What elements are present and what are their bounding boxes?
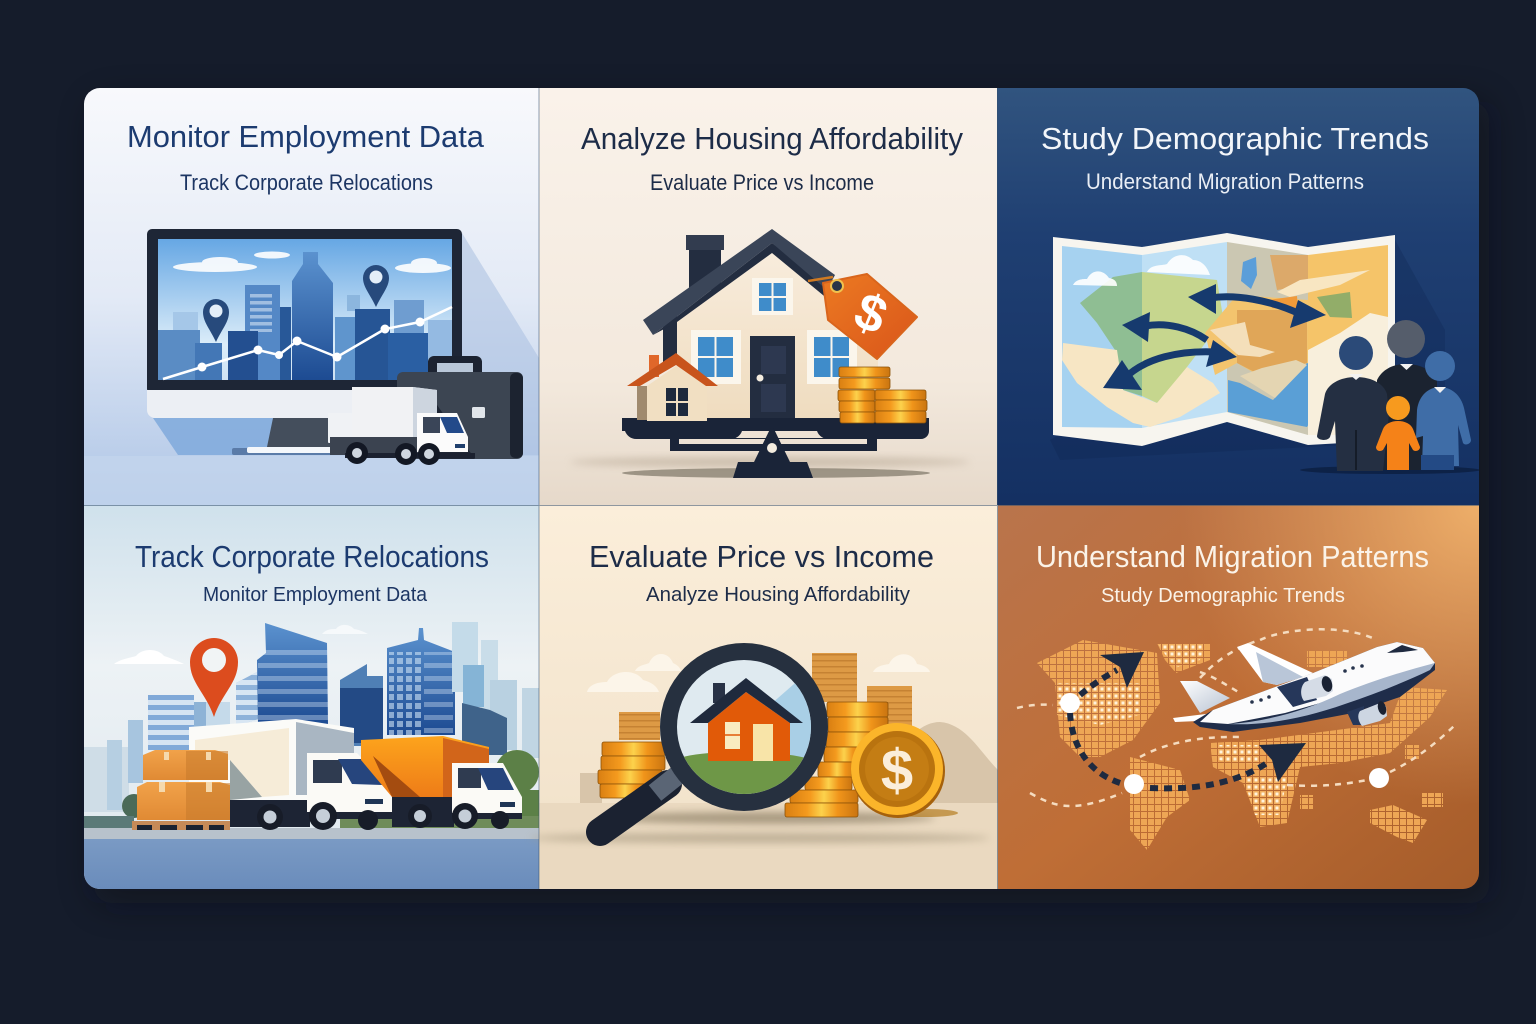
illustration: city skyline xyxy=(84,622,539,828)
panel: understand migration patterns xyxy=(998,505,1479,889)
subheading: track corporate relocations: Track Corporate Relocations xyxy=(180,170,433,195)
icon: coin stacks xyxy=(838,367,927,423)
heading: understand migration patterns: Understand Migration Patterns xyxy=(1036,539,1429,574)
icon: large house xyxy=(643,229,878,418)
heading: evaluate price vs income: Evaluate Price vs Income xyxy=(589,539,934,574)
subheading: analyze housing affordability: Analyze Housing Affordability xyxy=(646,583,911,606)
icon: orange map pin xyxy=(190,638,238,717)
icon: airplane xyxy=(1173,642,1435,732)
ground shadow xyxy=(570,457,970,467)
backdrop: hill and clouds xyxy=(530,654,998,843)
icon: small house xyxy=(627,353,718,421)
icon: balance scale xyxy=(622,418,930,478)
line chart xyxy=(163,307,452,379)
panel dividers xyxy=(84,88,1479,889)
icon: coin stacks xyxy=(598,653,912,817)
icon: desktop monitor with skyline chart xyxy=(147,229,462,455)
icon: price tag xyxy=(808,274,917,359)
heading: track corporate relocations: Track Corporate Relocations xyxy=(135,539,489,574)
subheading: study demographic trends: Study Demographic Trends xyxy=(1101,584,1345,607)
subheading: monitor employment data: Monitor Employment Data xyxy=(203,583,428,606)
panel: analyze housing affordability xyxy=(539,88,997,505)
icon: folded map xyxy=(1050,233,1445,460)
panel: study demographic trends xyxy=(997,88,1480,505)
icon: family silhouettes xyxy=(1300,320,1480,474)
icon: map pin left xyxy=(203,299,229,342)
arrows: dashed flight paths xyxy=(1017,629,1457,806)
subheading: evaluate price vs income: Evaluate Price vs Income xyxy=(650,170,874,195)
icon: map pin right xyxy=(363,265,389,307)
arrows: migration flows xyxy=(1103,284,1326,390)
icon: price tag: $ xyxy=(846,282,895,346)
subheading: understand migration patterns: Understand Migration Patterns xyxy=(1086,169,1364,194)
icon: moving truck xyxy=(328,387,475,465)
heading: study demographic trends: Study Demographic Trends xyxy=(1041,121,1429,156)
icon: briefcase xyxy=(397,356,523,459)
panel: monitor employment data xyxy=(84,88,539,505)
panel: track corporate relocations xyxy=(84,505,539,889)
icon: dollar coin xyxy=(851,723,945,818)
heading: monitor employment data: Monitor Employment Data xyxy=(127,119,485,154)
icon: white moving truck xyxy=(189,719,392,830)
icon: orange moving truck xyxy=(361,736,522,829)
card shadow xyxy=(94,102,1489,903)
panel: evaluate price vs income xyxy=(530,505,998,889)
icon: magnifying glass with house xyxy=(600,643,828,832)
heading: analyze housing affordability: Analyze Housing Affordability xyxy=(581,121,963,156)
icon: dollar coin: $ xyxy=(881,738,913,803)
illustration: dotted world map xyxy=(1037,640,1447,850)
icon: cardboard boxes xyxy=(132,750,230,830)
infographic card grid xyxy=(84,88,1480,889)
